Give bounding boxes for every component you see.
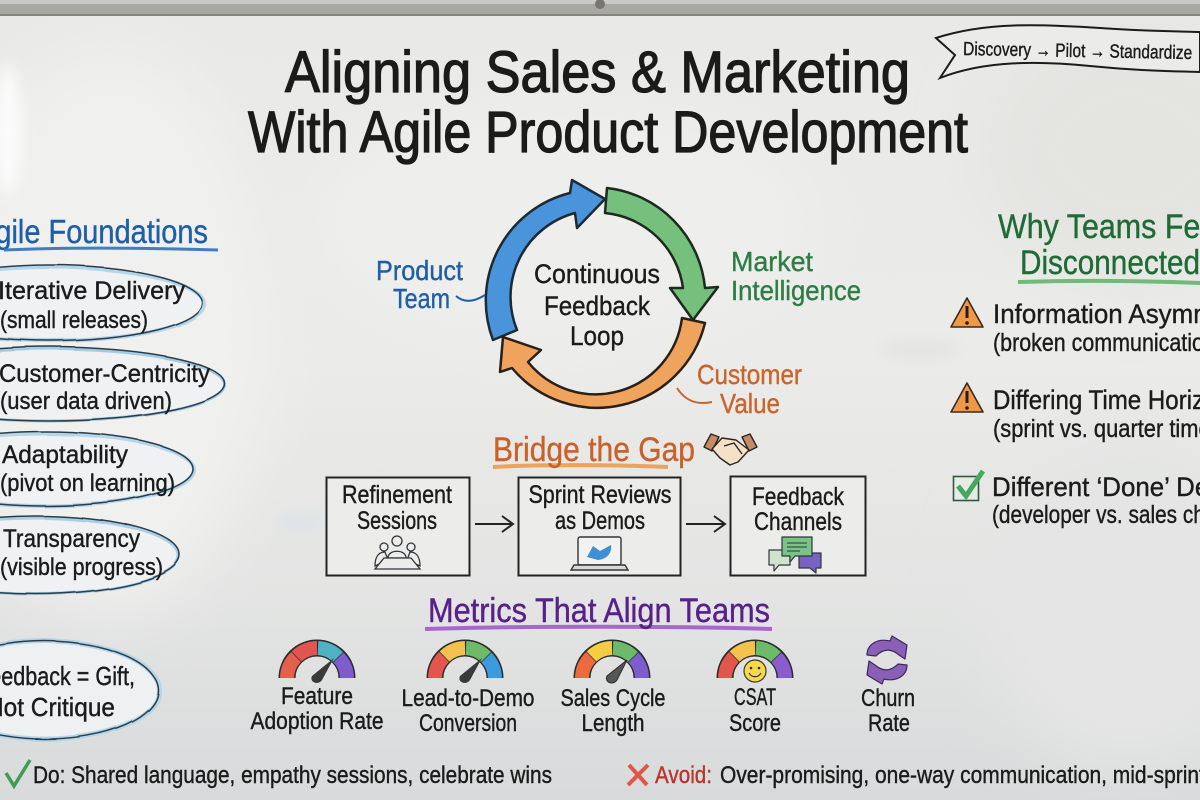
icon: churn cycle arrows xyxy=(867,636,907,684)
pill: adaptability: (pivot on learning) xyxy=(0,470,175,497)
metric: lead-to-demo conversion: Conversion xyxy=(419,710,517,737)
label: customer value: Customer xyxy=(697,359,802,390)
icon: green checkbox xyxy=(954,471,983,500)
metric: csat score xyxy=(725,648,785,737)
arrow: blue product team xyxy=(486,180,605,340)
icon: laptop xyxy=(571,537,628,570)
box: sprint reviews as demos: Sprint Reviews xyxy=(528,481,672,509)
pill: iterative delivery xyxy=(0,265,204,341)
arrow: sprint reviews to feedback channels xyxy=(686,516,725,532)
callout: feedback is a gift xyxy=(0,641,159,739)
pill: customer-centricity xyxy=(0,347,225,421)
box: sprint reviews as demos xyxy=(518,478,680,576)
label: product team: Team xyxy=(393,283,450,314)
metric: churn rate: Rate xyxy=(868,710,910,737)
label: product team xyxy=(376,255,485,314)
icon: meeting table xyxy=(375,536,420,569)
box: sprint reviews as demos: as Demos xyxy=(555,507,645,535)
icon: red cross xyxy=(628,765,648,785)
icon: warning triangle xyxy=(951,383,983,412)
arrow: green market intelligence xyxy=(605,188,718,320)
metric: feature adoption rate xyxy=(250,648,384,735)
pill: adaptability xyxy=(0,432,194,506)
item: differing time horizons xyxy=(951,383,1200,443)
box: refinement sessions: Refinement xyxy=(342,481,452,509)
title: With Agile Product Development xyxy=(248,100,968,165)
heading: metrics: Metrics That Align Teams xyxy=(428,592,770,630)
panel: metrics that align teams xyxy=(250,592,915,737)
arrow: orange customer value xyxy=(500,318,705,408)
metric: csat score: Score xyxy=(729,710,781,737)
loop center label: Feedback xyxy=(544,291,650,321)
loop center label: Continuous xyxy=(534,259,660,289)
panel: bridge the gap xyxy=(326,431,866,576)
pill: transparency xyxy=(0,516,180,594)
pill: adaptability: Adaptability xyxy=(2,441,128,469)
label: market intelligence xyxy=(731,246,861,306)
title: Aligning Sales & Marketing xyxy=(285,40,910,105)
metric: sales cycle length: Length xyxy=(582,710,644,737)
metric: csat score: CSAT xyxy=(734,684,776,711)
pill: customer-centricity: (user data driven) xyxy=(0,388,172,415)
heading: bridge the gap: Bridge the Gap xyxy=(493,431,695,469)
icon: warning triangle xyxy=(951,298,983,327)
box: feedback channels: Channels xyxy=(754,508,842,536)
title xyxy=(248,40,968,165)
loop center label xyxy=(534,259,660,351)
label: market intelligence: Intelligence xyxy=(731,275,861,306)
pill: iterative delivery: (small releases) xyxy=(0,307,148,334)
note: avoid: Avoid: xyxy=(655,762,712,789)
metric: churn rate xyxy=(861,636,915,737)
pill: transparency: Transparency xyxy=(3,525,140,553)
icon: green check xyxy=(6,760,30,786)
box: refinement sessions: Sessions xyxy=(357,507,437,535)
box: feedback channels: Feedback xyxy=(752,483,844,511)
item: different done definitions xyxy=(954,471,1200,529)
metric: lead-to-demo conversion xyxy=(402,648,534,737)
loop center label: Loop xyxy=(570,321,624,351)
label: customer value xyxy=(677,359,802,419)
metric: churn rate: Churn xyxy=(861,685,915,712)
metric: sales cycle length: Sales Cycle xyxy=(560,685,666,712)
pill: transparency: (visible progress) xyxy=(0,554,163,581)
metric: lead-to-demo conversion: Lead-to-Demo xyxy=(402,685,534,712)
banner: roadmap steps xyxy=(936,25,1200,78)
label: market intelligence: Market xyxy=(731,246,813,277)
panel: why teams feel disconnected xyxy=(951,208,1200,529)
note: do: Do: Shared language, empathy sessions, celebrate wins xyxy=(33,762,552,789)
heading: why teams feel disconnected xyxy=(998,208,1200,283)
metric: feature adoption rate: Feature xyxy=(281,683,353,710)
box: feedback channels xyxy=(730,476,866,576)
label: customer value: Value xyxy=(720,388,780,419)
pill: iterative delivery: Iterative Delivery xyxy=(0,277,185,305)
box: refinement sessions xyxy=(326,478,470,576)
item: information asymmetry xyxy=(951,298,1200,357)
icon: chat bubbles xyxy=(769,537,821,573)
panel: agile foundations xyxy=(0,213,225,739)
metric: sales cycle length xyxy=(560,648,666,737)
pill: customer-centricity: Customer-Centricity xyxy=(0,360,210,388)
label: product team: Product xyxy=(376,255,463,286)
metric: feature adoption rate: Adoption Rate xyxy=(250,708,384,735)
chart: continuous feedback loop xyxy=(376,180,861,419)
arrow: refinement to sprint reviews xyxy=(475,516,513,532)
icon: handshake xyxy=(704,434,757,465)
